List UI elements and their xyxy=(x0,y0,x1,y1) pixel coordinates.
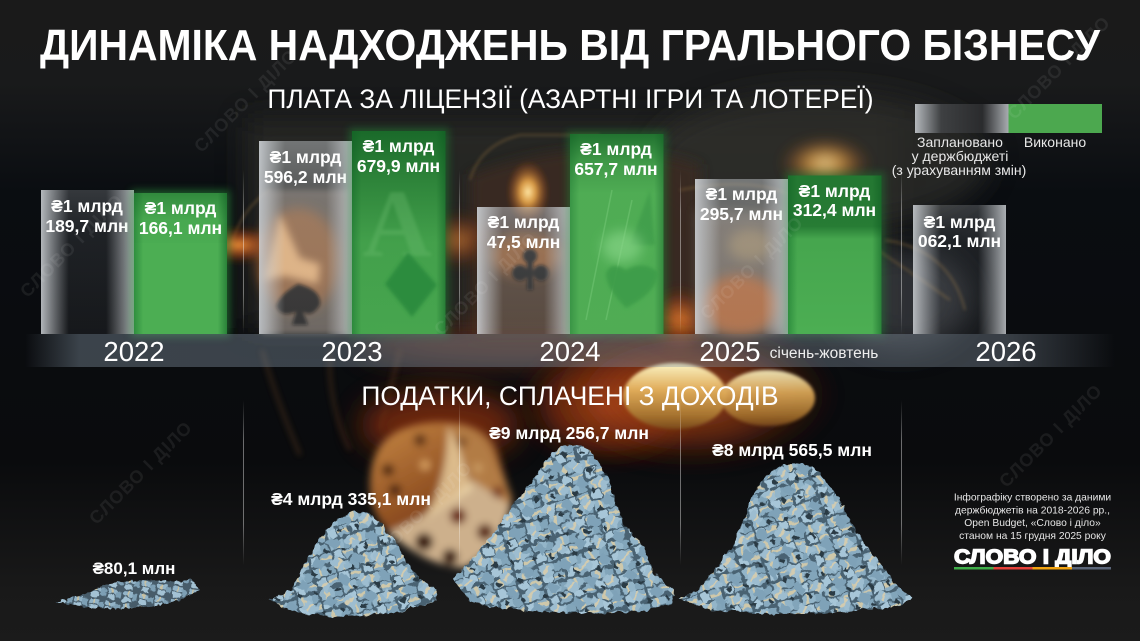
bar 2026 planned: ₴1 млрд xyxy=(924,212,995,232)
year band: 2025 xyxy=(699,336,761,367)
watermarks: СЛОВО І ДІЛО xyxy=(365,457,476,568)
money pile 2023: ₴4 млрд 335,1 млн xyxy=(271,489,431,509)
bar 2022 actual: 166,1 млн xyxy=(139,218,222,238)
bar 2023 actual xyxy=(349,128,449,337)
watermarks: СЛОВО І ДІЛО xyxy=(85,417,196,528)
watermarks: СЛОВО І ДІЛО xyxy=(16,190,127,301)
money pile 2025 xyxy=(670,440,920,618)
source note xyxy=(954,492,1111,542)
bar 2025 planned: ₴1 млрд xyxy=(706,184,777,204)
bar 2022 actual xyxy=(131,190,230,337)
bar chart: licence fee by year xyxy=(41,128,1006,337)
bar 2024 planned: 47,5 млн xyxy=(487,232,560,252)
bar 2024 planned xyxy=(477,207,570,334)
source note: станом на 15 грудня 2025 року xyxy=(959,531,1107,542)
bar 2026 planned xyxy=(913,205,1006,334)
bar 2023 actual: 679,9 млн xyxy=(357,156,440,176)
bar 2025 actual xyxy=(785,172,885,337)
dice xyxy=(370,422,512,568)
year band: 2022 xyxy=(103,336,165,367)
watermarks: СЛОВО І ДІЛО xyxy=(696,212,807,323)
legend xyxy=(892,104,1102,178)
bar 2025 actual: ₴1 млрд xyxy=(799,181,870,201)
bar 2023 planned: 596,2 млн xyxy=(264,167,347,187)
money pile 2022 xyxy=(55,562,200,610)
year band: 2026 xyxy=(975,336,1037,367)
watermarks: СЛОВО І ДІЛО xyxy=(1003,12,1114,123)
source note: Інфографіку створено за даними xyxy=(954,492,1111,504)
bar 2023 planned: ₴1 млрд xyxy=(270,147,341,167)
bar 2023 planned xyxy=(259,141,352,334)
logo: СЛОВО І ДІЛО xyxy=(954,546,1111,568)
bar 2022 planned xyxy=(41,190,134,334)
bar 2025 planned: 295,7 млн xyxy=(700,204,783,224)
watermarks: СЛОВО І ДІЛО xyxy=(430,228,541,339)
money pile 2024 xyxy=(453,427,675,614)
bar 2024 actual xyxy=(567,131,667,337)
year dividers xyxy=(243,170,902,565)
bar 2022 planned: ₴1 млрд xyxy=(51,196,123,216)
bar 2025 planned xyxy=(695,179,788,334)
year band: січень-жовтень xyxy=(770,345,878,362)
year band xyxy=(25,334,1115,367)
money pile 2024: ₴9 млрд 256,7 млн xyxy=(489,423,649,443)
source note: Open Budget, «Слово і діло» xyxy=(964,518,1101,529)
money pile 2023 xyxy=(268,493,438,618)
bar 2024 actual: ₴1 млрд xyxy=(580,139,652,159)
bar 2026 planned: 062,1 млн xyxy=(918,231,1001,251)
bar 2024 actual: 657,7 млн xyxy=(574,159,658,179)
legend: Заплановано xyxy=(917,134,1003,150)
legend: (з урахуванням змін) xyxy=(892,162,1026,178)
year band: 2024 xyxy=(539,336,601,367)
watermarks: СЛОВО І ДІЛО xyxy=(995,380,1106,491)
legend: у держбюджеті xyxy=(912,148,1008,164)
bar 2024 planned: ₴1 млрд xyxy=(488,212,559,232)
heading: income taxes: ПОДАТКИ, СПЛАЧЕНІ З ДОХОДІВ xyxy=(361,381,779,411)
watermarks: СЛОВО І ДІЛО xyxy=(190,45,301,156)
heading: licence fee: ПЛАТА ЗА ЛІЦЕНЗІЇ (АЗАРТНІ ІГРИ ТА ЛОТЕРЕЇ) xyxy=(267,84,874,114)
bar 2022 actual: ₴1 млрд xyxy=(145,198,216,218)
bar 2025 actual: 312,4 млн xyxy=(793,200,876,220)
source note: держбюджетів на 2018-2026 рр., xyxy=(955,504,1110,516)
year band: 2023 xyxy=(321,336,383,367)
money pile 2025: ₴8 млрд 565,5 млн xyxy=(712,440,872,460)
bar 2022 planned: 189,7 млн xyxy=(45,216,129,236)
legend: Виконано xyxy=(1024,134,1086,150)
money pile 2022: ₴80,1 млн xyxy=(93,559,175,578)
bar 2023 actual: A xyxy=(362,170,432,277)
bar 2023 actual: ₴1 млрд xyxy=(363,136,434,156)
bar background art xyxy=(256,160,786,335)
